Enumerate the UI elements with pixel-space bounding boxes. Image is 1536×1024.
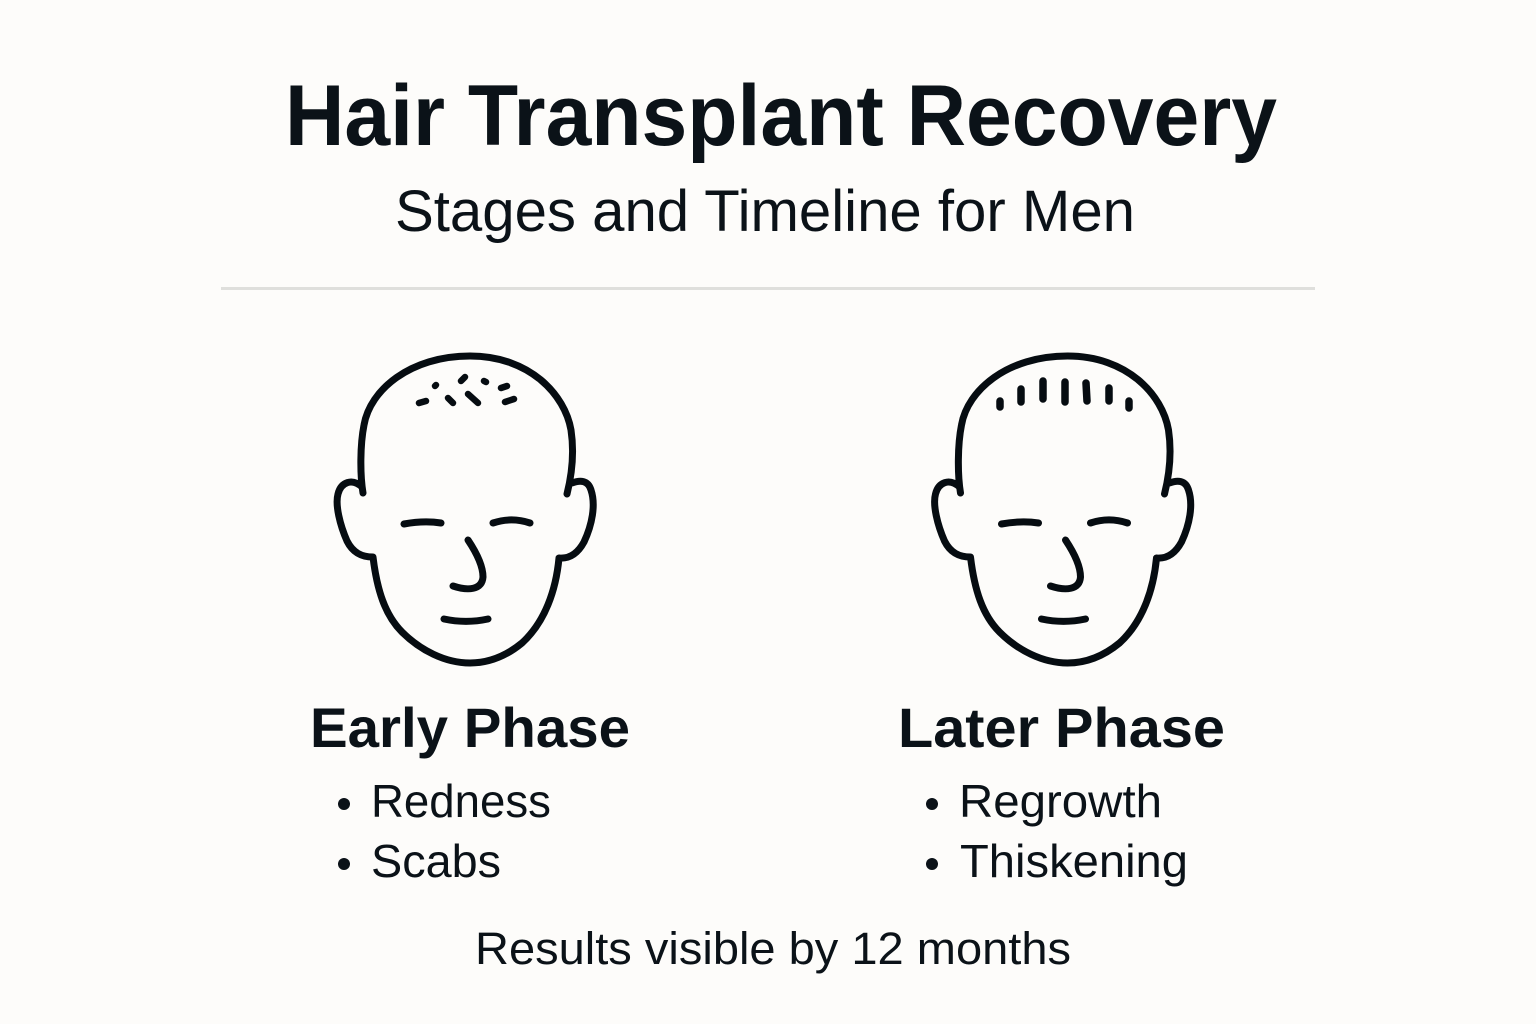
bullet list: later phase: Thiskening [960,835,1188,887]
bullet list: early phase [338,775,551,887]
panel: early phase [310,356,630,887]
title: Hair Transplant Recovery [285,68,1277,164]
heading: later phase: Later Phase [898,696,1225,759]
heading: early phase: Early Phase [310,696,630,759]
footer note: Results visible by 12 months [475,923,1071,974]
bullet list: later phase: Regrowth [959,775,1162,827]
bullet list: early phase: Scabs [371,835,501,887]
subtitle: Stages and Timeline for Men [395,179,1135,244]
bullet list: later phase [926,775,1188,887]
icon: later phase head with regrowth [935,356,1191,663]
bullet list: early phase: Redness [371,775,551,827]
icon: early phase head with scabs [337,356,593,663]
panel: later phase [898,356,1225,887]
